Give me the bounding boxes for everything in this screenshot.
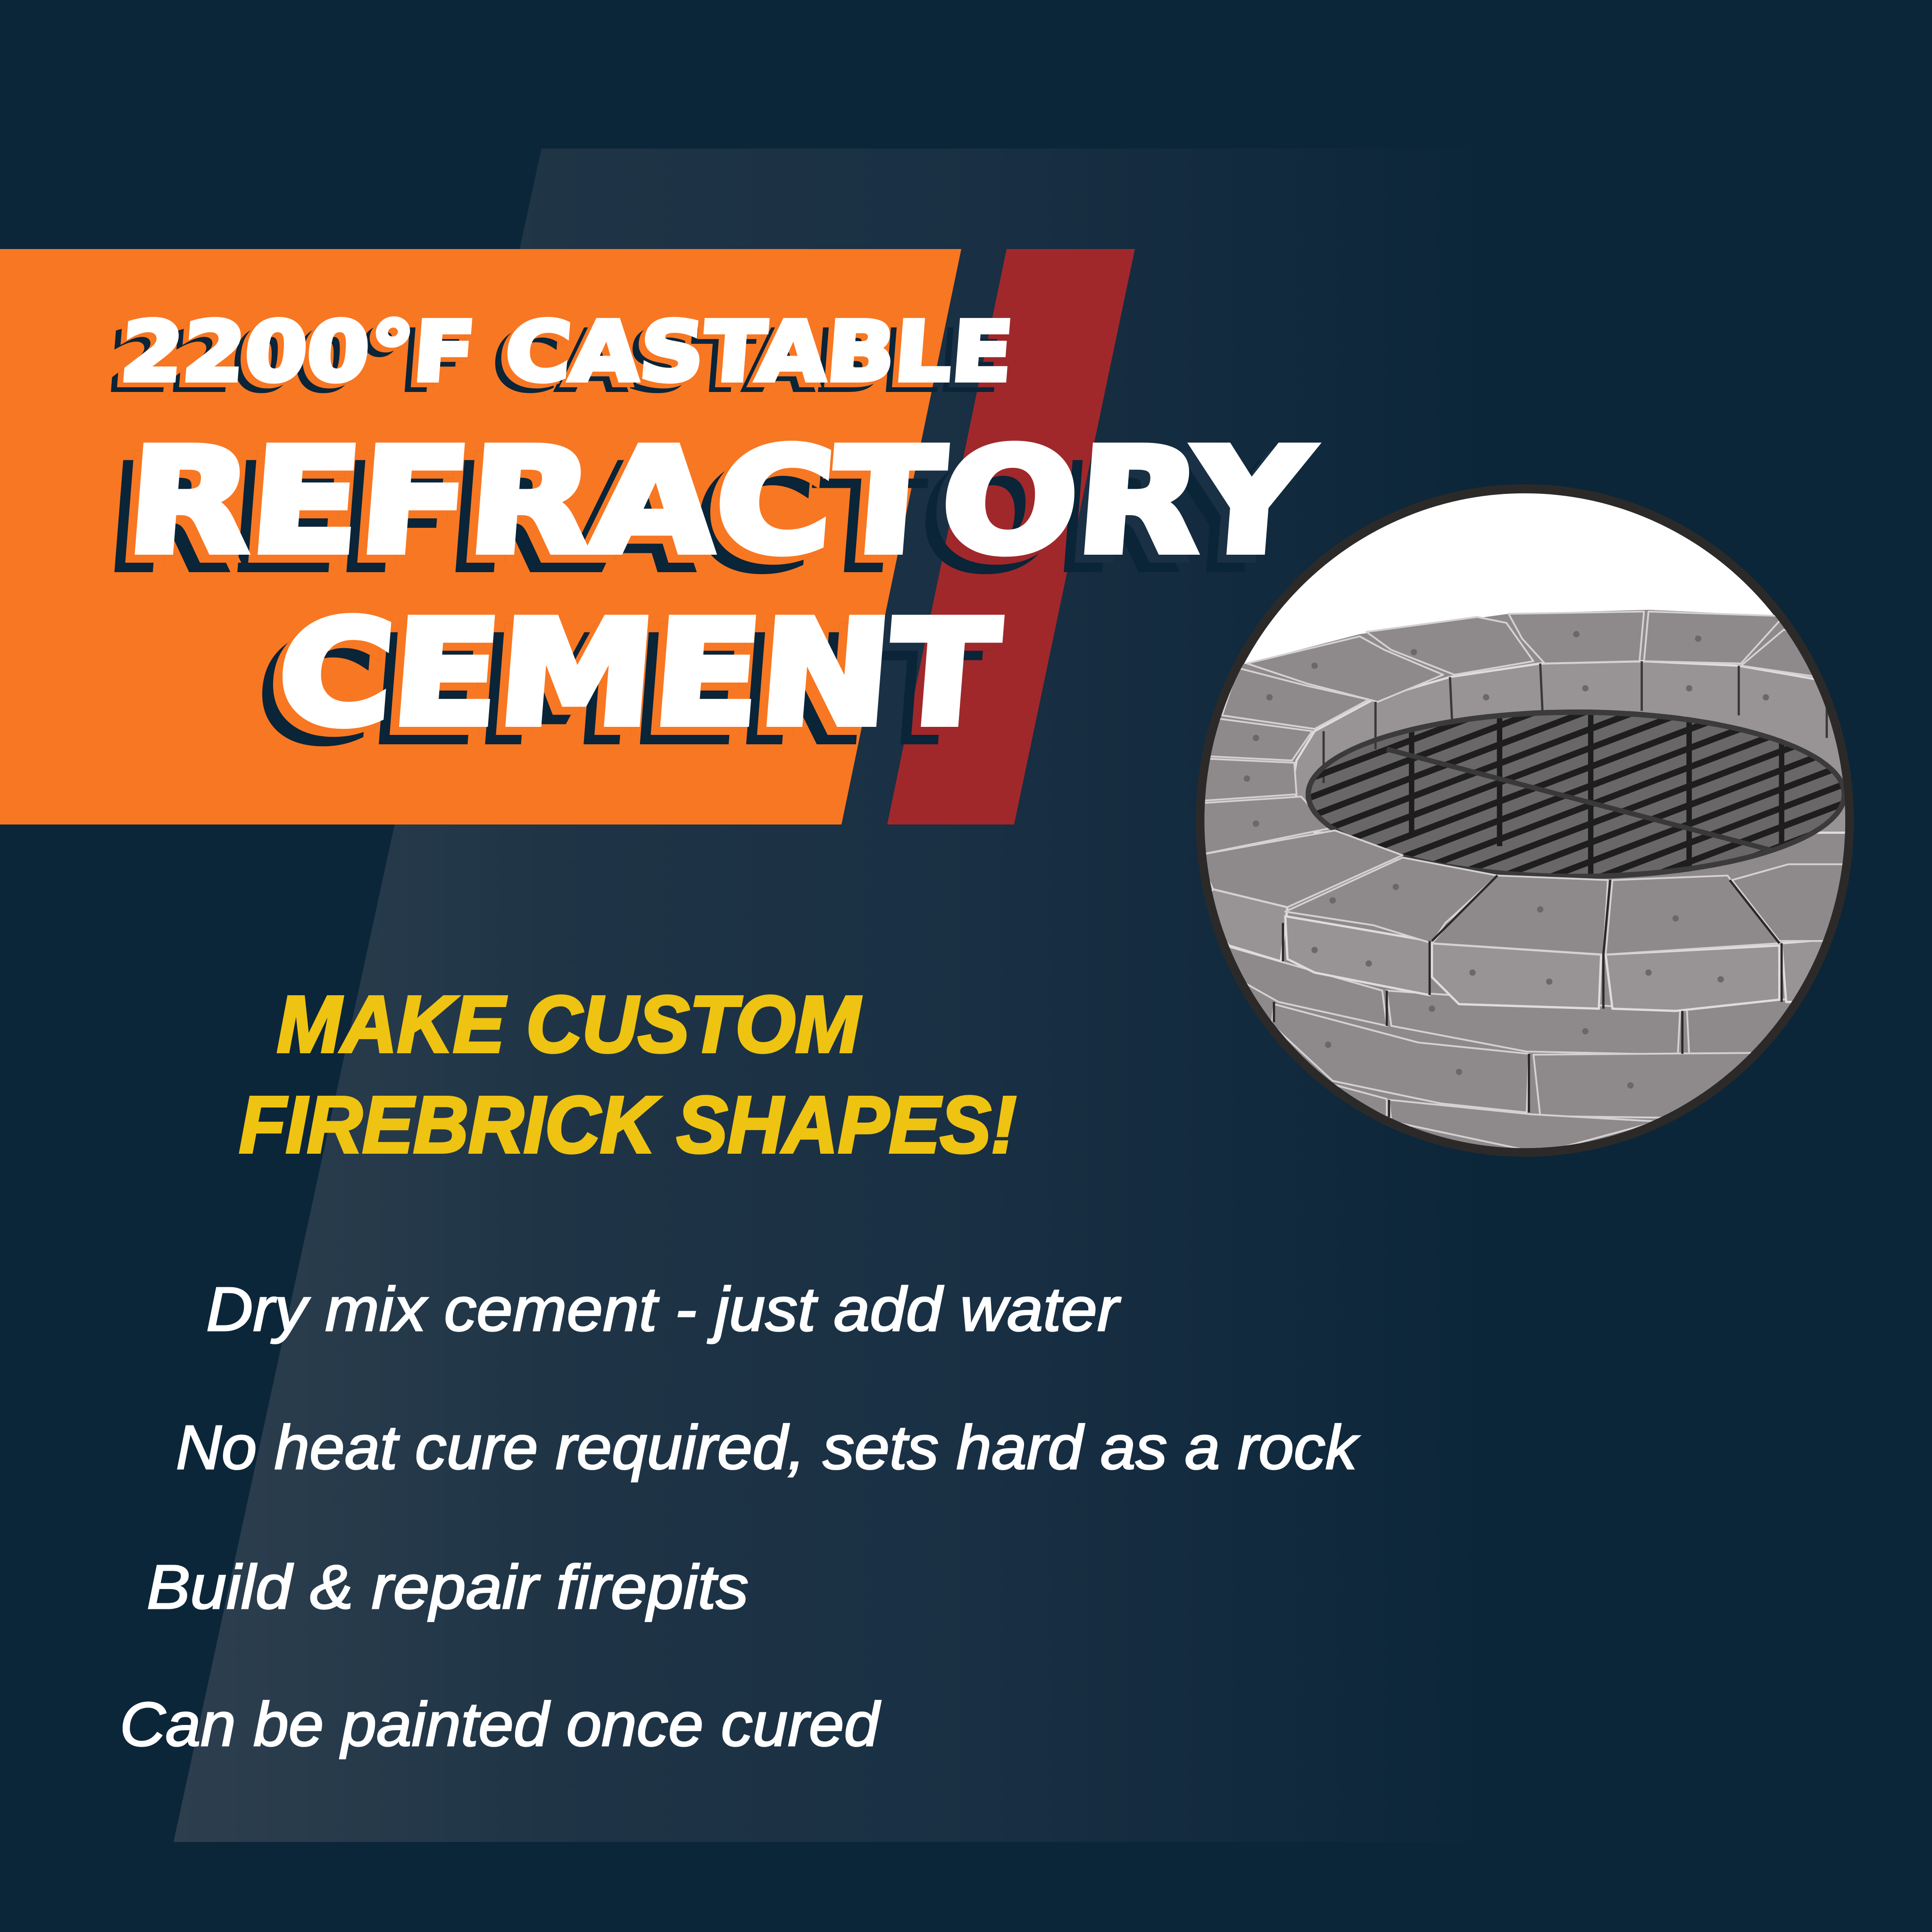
pit floor xyxy=(1306,709,1847,879)
title extruded shadow xyxy=(101,309,1307,774)
far wall joints xyxy=(1324,661,1827,783)
far rim stones xyxy=(1197,612,1865,854)
title line: Refractory: REFRACTORY xyxy=(122,417,1316,585)
slanted translucent background panel xyxy=(174,149,1486,1842)
subheading: Make custom firebrick shapes!: MAKE CUSTOM xyxy=(277,980,861,1069)
feature: no heat cure: No heat cure required, sets hard as a rock xyxy=(176,1413,1360,1482)
title: 2200°F Castable Refractory Cement xyxy=(101,304,1316,774)
title white lettering xyxy=(117,304,1316,757)
lower masonry courses xyxy=(1224,946,1829,1153)
red slanted stripe xyxy=(887,249,1135,824)
stone speckles xyxy=(1247,634,1766,1085)
stone base mass xyxy=(1179,610,1865,1158)
feature list xyxy=(120,1274,1360,1759)
circular photo: stone fire pit with grill grate xyxy=(1179,489,1892,1158)
orange title banner xyxy=(0,249,961,824)
far inner wall xyxy=(1292,661,1865,833)
feature: dry mix: Dry mix cement - just add water xyxy=(206,1274,1121,1344)
feature: paintable: Can be painted once cured xyxy=(120,1690,881,1759)
title line: 2200°F Castable: 2200°F CASTABLE xyxy=(117,304,1016,400)
feature: build and repair: Build & repair firepits xyxy=(147,1552,749,1622)
stone joints xyxy=(1274,875,1782,1117)
front rim stones xyxy=(1197,831,1865,1011)
subheading: Make custom firebrick shapes! xyxy=(239,980,1016,1170)
title line: Cement: CEMENT xyxy=(272,590,1004,757)
subheading: Make custom firebrick shapes!: FIREBRICK SHAPES! xyxy=(239,1080,1016,1170)
grill grate xyxy=(1260,539,1892,1063)
